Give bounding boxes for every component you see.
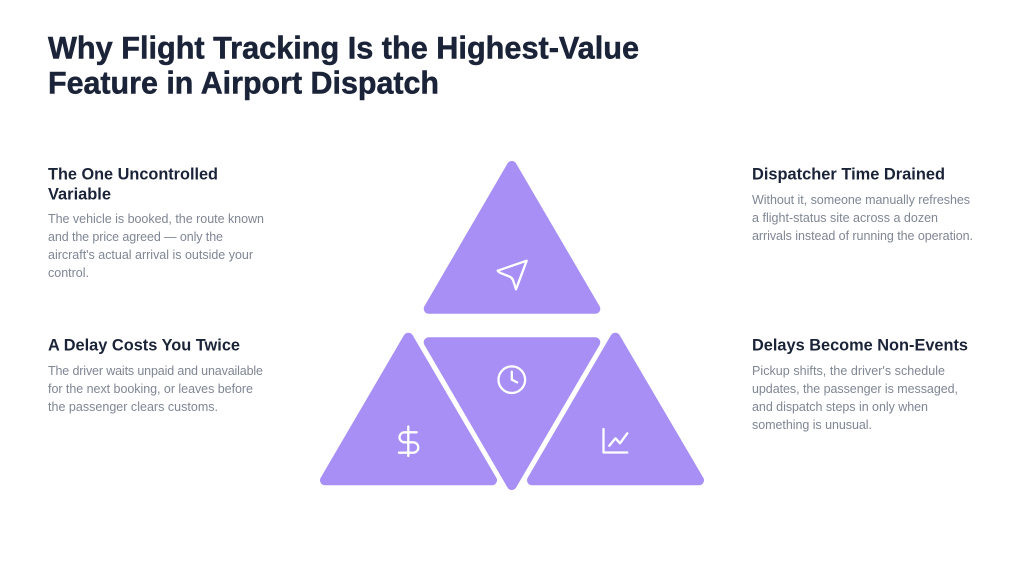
text block: Dispatcher Time Drained: a flight-status site across a dozen	[752, 211, 938, 225]
text block: Dispatcher Time Drained: arrivals instead of running the operation.	[752, 229, 973, 243]
text block: Delays Become Non-Events: Pickup shifts, the driver's schedule	[752, 364, 945, 378]
text block: The One Uncontrolled Variable: The vehicle is booked, the route known	[48, 212, 264, 226]
text block: Delays Become Non-Events: something is unusual.	[752, 418, 872, 432]
text block: Dispatcher Time Drained: Without it, someone manually refreshes	[752, 193, 970, 207]
triangle diagram	[325, 166, 699, 485]
text block: Dispatcher Time Drained: Dispatcher Time Drained	[752, 166, 945, 184]
title: Feature in Airport Dispatch	[48, 64, 439, 100]
text block: The One Uncontrolled Variable: control.	[48, 266, 89, 280]
top triangle with navigation icon	[429, 166, 595, 309]
text block: A Delay Costs You Twice: for the next booking, or leaves before	[48, 382, 253, 396]
text block: Delays Become Non-Events: Delays Become Non-Events	[752, 336, 968, 354]
text block: Dispatcher Time Drained	[752, 166, 973, 243]
lower-left triangle with dollar icon	[325, 338, 492, 480]
title: Why Flight Tracking Is the Highest-Value	[48, 30, 639, 66]
text block: Delays Become Non-Events	[752, 336, 968, 432]
icon: clock	[498, 366, 525, 393]
text block: The One Uncontrolled Variable: aircraft's actual arrival is outside your	[48, 248, 253, 262]
lower-right triangle with line chart icon	[532, 338, 699, 480]
text block: Delays Become Non-Events: updates, the passenger is messaged,	[752, 382, 958, 396]
text block: A Delay Costs You Twice: The driver waits unpaid and unavailable	[48, 364, 263, 378]
text block: A Delay Costs You Twice: the passenger clears customs.	[48, 400, 218, 414]
text block: The One Uncontrolled Variable: The One Uncontrolled	[48, 166, 218, 184]
title	[48, 30, 639, 100]
text block: Delays Become Non-Events: and dispatch steps in only when	[752, 400, 928, 414]
centre inverted triangle with clock icon	[429, 342, 595, 485]
icon: navigation arrow	[498, 261, 527, 289]
text block: A Delay Costs You Twice	[48, 336, 263, 414]
text block: A Delay Costs You Twice: A Delay Costs You Twice	[48, 336, 240, 354]
icon: dollar sign	[399, 426, 418, 456]
icon: line chart	[604, 429, 627, 452]
text block: The One Uncontrolled Variable: and the price agreed — only the	[48, 230, 223, 244]
text block: The One Uncontrolled Variable	[48, 166, 264, 280]
text block: The One Uncontrolled Variable: Variable	[48, 186, 111, 204]
